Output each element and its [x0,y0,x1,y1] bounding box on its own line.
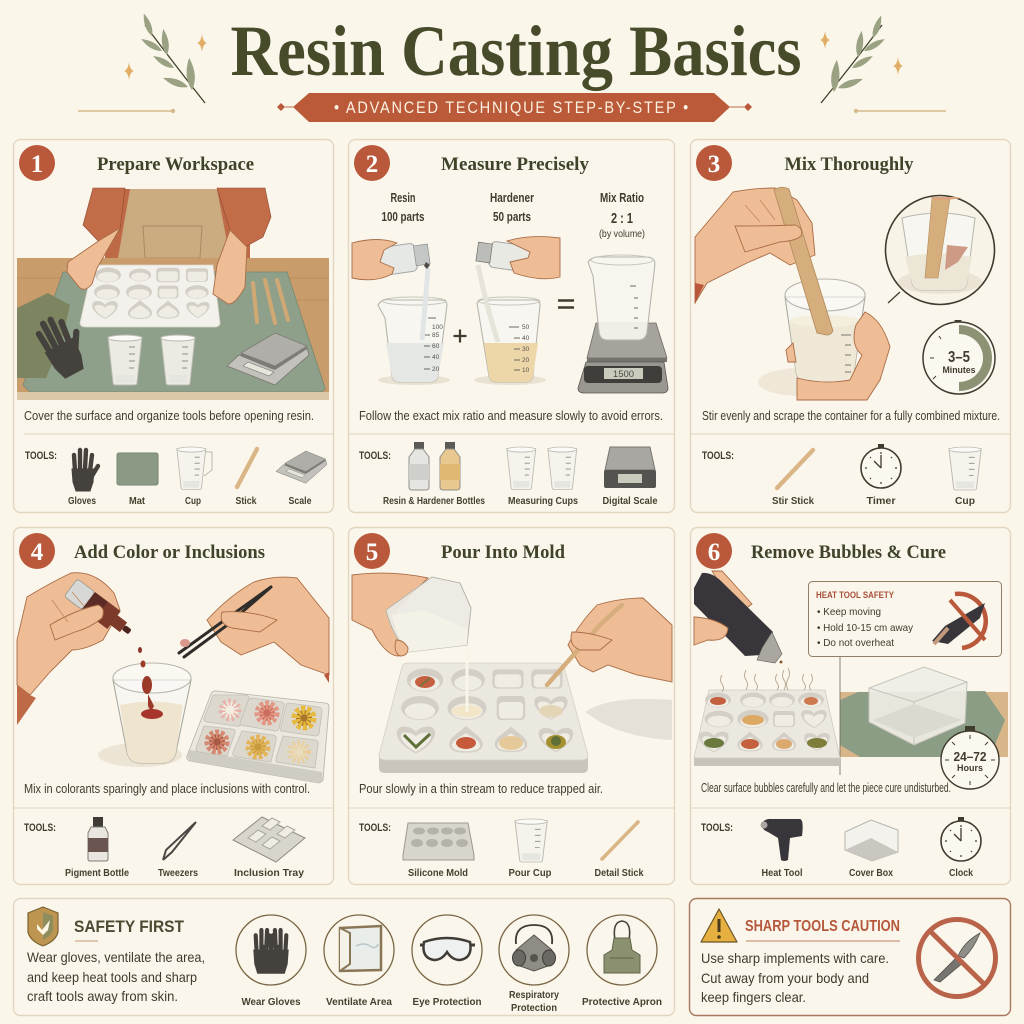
icon: left olive sprig [140,12,205,103]
beaker: hardener: 20 [522,357,530,364]
timer 3-5 minutes: 3–5 [948,349,970,366]
mixed beaker on digital scale: 1500 [613,369,634,380]
tool: cover box [845,820,898,879]
icon: eye protection: Eye Protection [412,996,482,1008]
icon: no sharp tools [918,920,996,996]
tool: stir stick: Stir Stick [772,495,814,507]
beaker: resin [378,297,447,382]
heading: Add Color or Inclusions [74,542,265,563]
decorative rules [78,110,946,112]
tool: digital scale [602,447,658,507]
caption: Pour slowly in a thin stream to reduce trapped air. [359,782,603,796]
inclusion tray [187,691,329,783]
step number 4: 4 [31,539,44,566]
heading: SHARP TOOLS CAUTION [745,918,900,935]
cured wells [699,692,830,752]
tools row: TOOLS: [359,450,391,462]
tools row [359,819,644,879]
panel: step 6 remove bubbles and cure [690,528,1010,884]
beaker: resin: 40 [432,354,440,361]
tool: heat tool: Heat Tool [762,867,803,879]
callout: heat tool safety: • Do not overheat [817,637,894,649]
icon: no overheating [932,594,986,648]
tool: detail stick [594,822,644,879]
tool: clock: Clock [949,867,973,879]
heading: Remove Bubbles & Cure [751,542,946,563]
tools row [25,447,327,507]
title: Resin Casting Basics [230,11,802,91]
heading: Prepare Workspace [97,154,254,175]
tool: pour cup: Pour Cup [508,867,552,879]
panel: safety first [14,898,674,1016]
icon: warning triangle [701,909,737,942]
tool: gloves: Gloves [68,495,96,507]
safety text [27,949,205,1004]
icon: wear gloves [236,915,306,1008]
step number 1: 1 [31,151,43,178]
safety text: craft tools away from skin. [27,988,178,1004]
stirring hand [695,188,815,303]
panel: step 2 measure precisely [348,140,674,512]
cup with colorant [113,647,191,763]
callout: heat tool safety [808,582,1002,656]
panel: step 5 pour into mold [348,528,674,884]
tool: tweezers [158,822,198,879]
tool: pigment bottle [65,817,129,879]
step number 6: 6 [708,539,720,566]
tool: cup [177,447,212,507]
tool: bottles: Resin & Hardener Bottles [383,495,485,507]
tool: scale [276,451,327,507]
timer 3-5 minutes [923,320,995,394]
timer 3-5 minutes: Minutes [942,365,976,376]
caption: Mix in colorants sparingly and place inclusions with control. [24,782,310,796]
panel: step 3 mix thoroughly [690,140,1010,512]
tool: inclusion tray: Inclusion Tray [234,867,304,879]
tool: stick: Stick [236,495,257,507]
tool: tweezers: Tweezers [158,867,198,879]
tool: timer: Timer [866,495,896,507]
illustration: pouring into mold [352,573,672,773]
tool: cup: Cup [955,495,975,507]
step number 2 [354,145,390,181]
tools row: TOOLS: [359,822,391,834]
tool: scale: Scale [288,495,312,507]
tool: mat [117,453,158,507]
tool: silicone mold [403,823,474,879]
tool: bottles [383,442,485,507]
heading: SAFETY FIRST [74,918,184,936]
tool: cover box: Cover Box [849,867,893,879]
icon: protective apron [582,915,662,1008]
step number 5 [354,533,390,569]
bottle and hand: resin [352,240,431,280]
hand and pigment bottle [17,573,137,725]
icon: ventilate area: Ventilate Area [326,996,392,1008]
steam [720,668,812,692]
hand and tweezers [179,577,329,683]
illustration: curing [694,571,1008,789]
tool: cup [949,447,981,507]
step number 4 [19,533,55,569]
icon: eye protection [412,915,482,1008]
tool: clock [941,817,981,879]
callout: heat tool safety: • Hold 10-15 cm away [817,622,914,634]
illustration: pouring and measuring [352,237,668,393]
header: title and banner [78,11,946,122]
caution text: Use sharp implements with care. [701,950,889,966]
step number 5: 5 [366,539,378,566]
safety text: and keep heat tools and sharp [27,969,197,985]
tools row [359,442,658,507]
caution text: Cut away from your body and [701,970,869,986]
beaker: resin: 60 [432,343,440,350]
caution text [701,950,889,1005]
tools row [701,817,981,879]
tools row [24,817,305,879]
timer 24-72 hours: 24–72 [954,749,986,764]
mixed beaker on digital scale [578,255,668,393]
tool: inclusion tray [233,817,305,879]
beaker: hardener: 50 [522,324,530,331]
panel: step 4 add color or inclusions [14,528,334,884]
caption: Follow the exact mix ratio and measure slowly to avoid errors. [359,409,663,423]
cover box [869,667,967,745]
tool: measuring cups: Measuring Cups [508,495,578,507]
panel: sharp tools caution [690,898,1010,1016]
icon: ventilate area [324,915,394,1008]
mold wells [397,668,573,754]
tool: stir stick [772,450,814,507]
safety text: Wear gloves, ventilate the area, [27,949,205,965]
icon: protective apron: Protective Apron [582,996,662,1008]
tools row: TOOLS: [701,822,733,834]
callout: heat tool safety: • Keep moving [817,606,881,618]
illustration: stirring cup [695,187,995,400]
beaker: hardener: 10 [522,367,530,374]
resin and hardener labels: 100 parts [382,210,425,224]
subtitle banner: • ADVANCED TECHNIQUE STEP-BY-STEP • [334,99,690,117]
tool: digital scale: Digital Scale [602,495,658,507]
tool: measuring cups [507,447,578,507]
tool: gloves [68,450,98,507]
tools row [702,444,981,507]
icon: respiratory protection: Respiratory [509,989,559,1001]
illustration: adding color [17,573,329,783]
caption: Cover the surface and organize tools before opening resin. [24,409,314,423]
icon: sparkles [124,31,903,80]
beaker: hardener: 30 [522,346,530,353]
step number 2: 2 [366,151,378,178]
resin and hardener labels: Mix Ratio [600,191,644,205]
step number 3: 3 [708,151,720,178]
resin and hardener labels: (by volume) [599,229,645,240]
icon: right olive sprig [821,14,886,103]
flowers [209,702,312,760]
resin and hardener labels [382,191,645,240]
resin and hardener labels: 50 parts [493,210,531,224]
resin and hardener labels: Hardener [490,191,534,205]
subtitle banner [277,93,752,122]
bottle and hand: hardener [475,237,560,279]
cup [785,279,865,383]
magnifier [886,196,994,304]
heat gun and hand [694,571,782,664]
panel: step 1 prepare workspace [14,140,334,512]
beaker: resin: 85 [432,332,440,339]
tool: stick [236,449,257,507]
heading: Measure Precisely [441,154,590,175]
step number 3 [696,145,732,181]
tool: silicone mold: Silicone Mold [408,867,468,879]
resin and hardener labels: Resin [390,191,416,205]
step number 6 [696,533,732,569]
step number 1 [19,145,55,181]
tools row: TOOLS: [25,450,57,462]
icon: wear gloves: Wear Gloves [242,996,301,1008]
icon: shield [28,907,58,946]
beaker: hardener [477,297,540,382]
beaker: resin: 20 [432,366,440,373]
tools row: TOOLS: [24,822,56,834]
callout: heat tool safety: HEAT TOOL SAFETY [816,590,895,601]
equals [558,300,574,308]
tool: cup: Cup [185,495,201,507]
tool: timer [861,444,901,507]
tool: mat: Mat [129,495,145,507]
tool: detail stick: Detail Stick [594,867,644,879]
icon: respiratory protection: Protection [511,1002,557,1014]
beaker: resin: 100 [432,324,443,331]
plus [454,330,466,342]
tool: pour cup [508,819,552,879]
timer 24-72 hours [941,726,999,789]
timer 24-72 hours: Hours [957,763,983,773]
caution text: keep fingers clear. [701,989,806,1005]
supporting hand [797,312,890,400]
heading: Pour Into Mold [441,542,565,563]
illustration: workspace [17,188,329,400]
heading: Mix Thoroughly [784,154,914,175]
pouring hand and cup [352,573,471,656]
resin and hardener labels: 2 : 1 [611,210,633,227]
beaker: hardener: 40 [522,335,530,342]
tool: heat tool [760,819,803,879]
icon: respiratory protection [499,915,569,1014]
guiding hand and stick [547,598,672,685]
tools row: TOOLS: [702,450,734,462]
tool: pigment bottle: Pigment Bottle [65,867,129,879]
